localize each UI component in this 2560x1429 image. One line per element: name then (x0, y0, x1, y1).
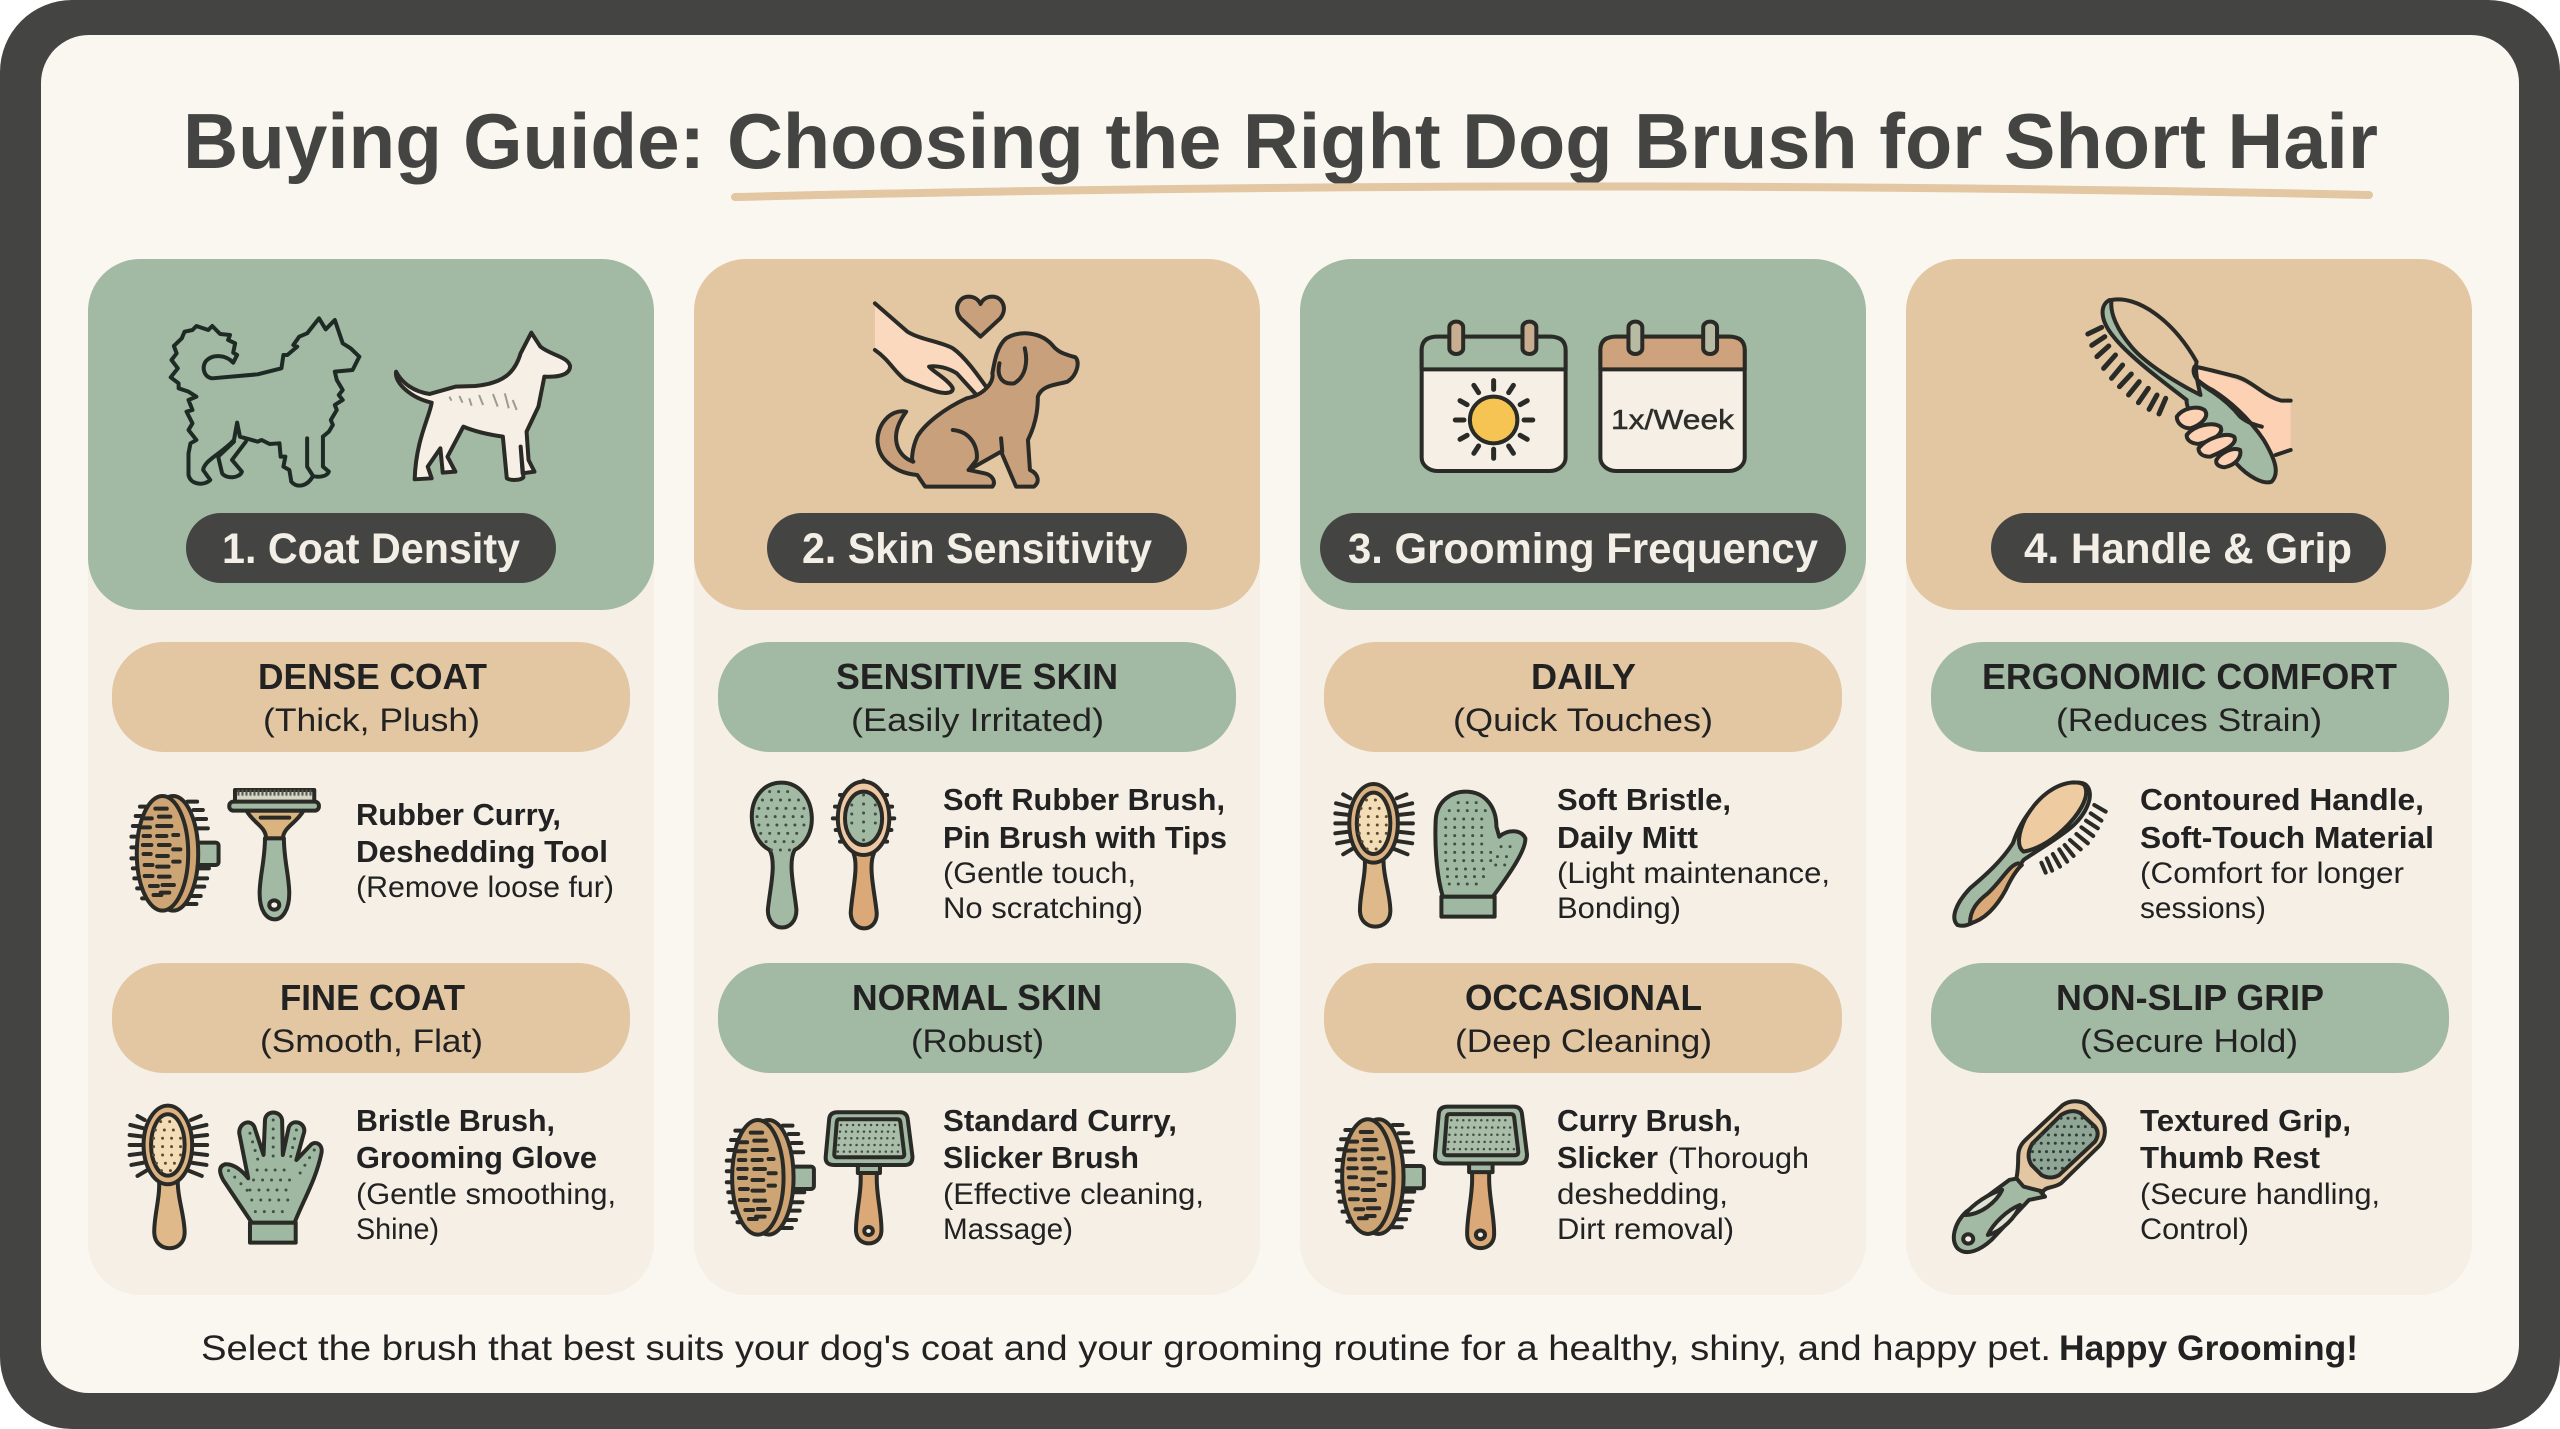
panel header (694, 259, 1260, 610)
text: soft bristle recommendation: Daily Mitt (1557, 820, 1698, 855)
icon: hand holding brush (2088, 299, 2291, 482)
option pill: dense coat: DENSE COAT (258, 656, 487, 697)
option pill: sensitive skin: (Easily Irritated) (851, 702, 1104, 738)
text: bristle brush recommendation (356, 1103, 616, 1246)
text: standard curry recommendation: (Effective cleaning, (943, 1178, 1204, 1211)
option pill: ergonomic comfort: (Reduces Strain) (2056, 702, 2322, 738)
option pill: ergonomic comfort (1931, 642, 2449, 752)
text: contoured handle recommendation: Soft-Touch Material (2140, 820, 2434, 855)
text: textured grip recommendation: Control) (2140, 1213, 2249, 1246)
icons: rubber curry and deshedding tool (131, 790, 319, 919)
text: standard curry recommendation: Slicker Brush (943, 1140, 1139, 1175)
text: rubber curry recommendation (356, 797, 614, 904)
title: Buying Guide: (183, 97, 705, 185)
option pill: fine coat: (Smooth, Flat) (260, 1023, 483, 1059)
option pill: occasional (1324, 963, 1842, 1073)
panel body (694, 259, 1260, 1295)
option pill: non-slip grip (1931, 963, 2449, 1073)
icon: weekly calendar (1600, 322, 1745, 471)
panel: 2. Skin Sensitivity (694, 259, 1260, 1295)
text: bristle brush recommendation: Shine) (356, 1213, 439, 1246)
text: rubber curry recommendation: Rubber Curry, (356, 797, 561, 832)
text: standard curry recommendation: Standard Curry, (943, 1103, 1177, 1138)
panel header (1906, 259, 2472, 610)
text: bristle brush recommendation: (Gentle smoothing, (356, 1178, 616, 1211)
text: contoured handle recommendation: (Comfort for longer (2140, 857, 2404, 890)
option pill: non-slip grip: NON-SLIP GRIP (2056, 977, 2324, 1018)
text: rubber curry recommendation: Deshedding Tool (356, 834, 608, 869)
panel body (1906, 259, 2472, 1295)
option pill: dense coat: (Thick, Plush) (263, 702, 480, 738)
text: textured grip recommendation: Thumb Rest (2140, 1140, 2320, 1175)
text: soft bristle recommendation: (Light maintenance, (1557, 857, 1830, 890)
text: textured grip recommendation (2140, 1103, 2380, 1246)
section title pill (186, 513, 556, 583)
panel: 1. Coat Density (88, 259, 654, 1295)
title underline (735, 186, 2369, 197)
title: Choosing the Right Dog Brush for Short Hair (727, 97, 2378, 185)
section title pill (767, 513, 1187, 583)
text: contoured handle recommendation: Contoured Handle, (2140, 782, 2424, 817)
text: standard curry recommendation (943, 1103, 1204, 1246)
text: curry brush recommendation: Curry Brush, (1557, 1103, 1741, 1138)
text: rubber curry recommendation: (Remove loose fur) (356, 871, 614, 904)
icon: contoured handle brush (1954, 782, 2106, 926)
panel header (1300, 259, 1866, 610)
text: contoured handle recommendation (2140, 782, 2434, 925)
section title pill (1320, 513, 1846, 583)
text: curry brush recommendation: Dirt removal) (1557, 1213, 1734, 1246)
panel header (88, 259, 654, 610)
text: curry brush recommendation (1557, 1103, 1809, 1246)
section title pill: 3. Grooming Frequency (1348, 525, 1818, 573)
option pill: sensitive skin (718, 642, 1236, 752)
text: contoured handle recommendation: sessions) (2140, 892, 2266, 925)
text: soft rubber recommendation: Pin Brush with Tips (943, 820, 1227, 855)
icon: hand petting puppy with heart (875, 297, 1078, 487)
option pill: ergonomic comfort: ERGONOMIC COMFORT (1982, 656, 2397, 697)
icons: curry brush and slicker (1337, 1107, 1527, 1248)
text: soft bristle recommendation: Bonding) (1557, 892, 1681, 925)
option pill: daily (1324, 642, 1842, 752)
text: textured grip recommendation: Textured Grip, (2140, 1103, 2351, 1138)
text: soft rubber recommendation: Soft Rubber Brush, (943, 782, 1225, 817)
footer message: Happy Grooming! (2059, 1329, 2358, 1368)
icons: soft rubber and pin brushes (752, 781, 894, 928)
option pill: normal skin: (Robust) (911, 1023, 1044, 1059)
option pill: fine coat (112, 963, 630, 1073)
option pill: daily: DAILY (1531, 656, 1636, 697)
text: curry brush recommendation: deshedding, (1557, 1178, 1728, 1211)
section title pill: 1. Coat Density (222, 525, 520, 573)
panel body (1300, 259, 1866, 1295)
option pill: occasional: OCCASIONAL (1465, 977, 1702, 1018)
icons: bristle brush and grooming glove (130, 1106, 322, 1248)
icons: standard curry and slicker brush (727, 1112, 912, 1243)
option pill: dense coat (112, 642, 630, 752)
option pill: fine coat: FINE COAT (280, 977, 465, 1018)
text: curry brush recommendation: Slicker (1557, 1140, 1658, 1175)
icon: daily sun calendar (1422, 322, 1566, 471)
section title pill (1991, 513, 2386, 583)
option pill: non-slip grip: (Secure Hold) (2080, 1023, 2298, 1059)
text: textured grip recommendation: (Secure handling, (2140, 1178, 2380, 1211)
text: soft bristle recommendation (1557, 782, 1830, 925)
text: soft rubber recommendation (943, 782, 1227, 925)
panel body (88, 259, 654, 1295)
text: curry brush recommendation: (Thorough (1668, 1142, 1809, 1175)
icon: fluffy and short-coated dogs (171, 318, 570, 486)
option pill: occasional: (Deep Cleaning) (1455, 1023, 1712, 1059)
option pill: normal skin (718, 963, 1236, 1073)
icon: weekly calendar: 1x/Week (1611, 404, 1735, 435)
icon: textured grip brush (1954, 1101, 2105, 1252)
icons: soft bristle brush and daily mitt (1335, 784, 1525, 927)
text: soft rubber recommendation: (Gentle touch, (943, 857, 1136, 890)
text: soft rubber recommendation: No scratching) (943, 892, 1143, 925)
section title pill: 2. Skin Sensitivity (802, 525, 1152, 573)
panel: 3. Grooming Frequency (1300, 259, 1866, 1295)
option pill: normal skin: NORMAL SKIN (852, 977, 1102, 1018)
footer message: Select the brush that best suits your dog's coat and your grooming routine for a healthy, shiny, and happy pet. (201, 1329, 2051, 1368)
text: standard curry recommendation: Massage) (943, 1213, 1073, 1246)
text: bristle brush recommendation: Bristle Brush, (356, 1103, 555, 1138)
section title pill: 4. Handle & Grip (2024, 525, 2352, 573)
option pill: daily: (Quick Touches) (1453, 702, 1713, 738)
option pill: sensitive skin: SENSITIVE SKIN (836, 656, 1118, 697)
panel: 4. Handle & Grip (1906, 259, 2472, 1295)
text: soft bristle recommendation: Soft Bristle, (1557, 782, 1731, 817)
text: bristle brush recommendation: Grooming Glove (356, 1140, 597, 1175)
